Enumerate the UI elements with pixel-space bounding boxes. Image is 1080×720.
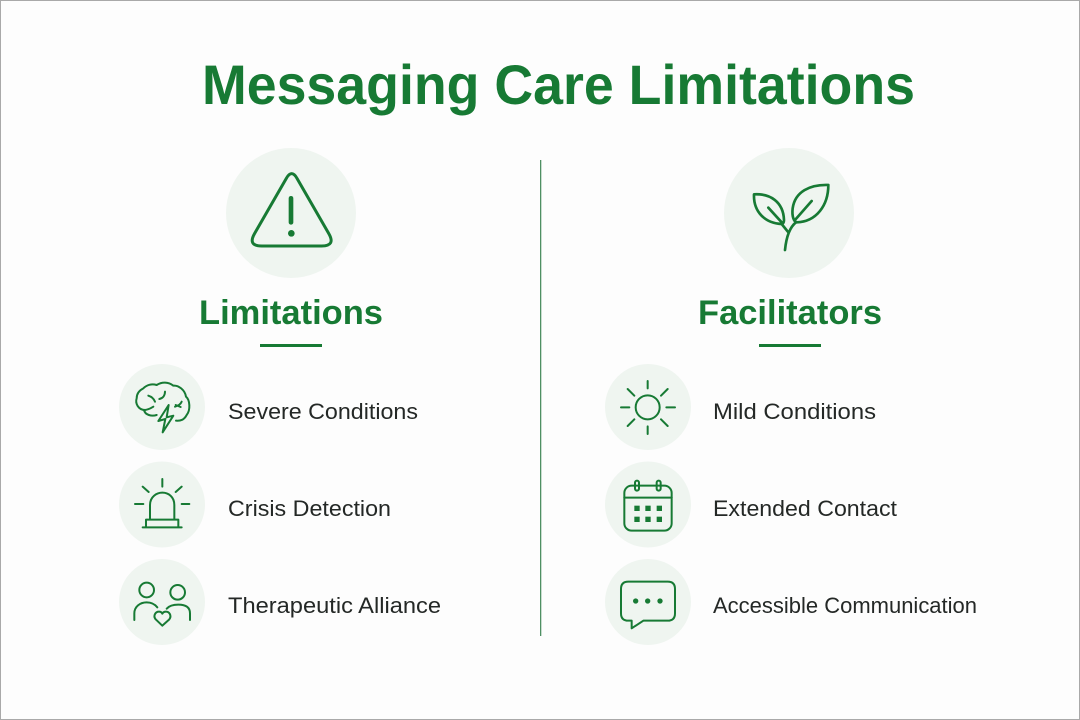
item: mild conditions: Mild Conditions: [713, 399, 876, 424]
item: accessible communication: Accessible Communication: [713, 593, 977, 618]
item: mild conditions: [605, 364, 876, 450]
heading underline: [759, 344, 821, 347]
item: crisis detection: [119, 462, 391, 548]
icon: two people with heart: [134, 583, 190, 626]
heading: facilitators: Facilitators: [698, 294, 882, 332]
icon: chat bubble: [621, 582, 675, 628]
icon: sun: [621, 381, 675, 434]
title: Messaging Care Limitations: [202, 53, 915, 116]
icon: brain with lightning: [136, 383, 189, 432]
item: crisis detection: Crisis Detection: [228, 496, 391, 521]
icon: siren: [135, 479, 189, 527]
icon: sprout: [724, 148, 854, 278]
icon: calendar: [624, 481, 672, 531]
item: extended contact: Extended Contact: [713, 496, 897, 521]
heading: limitations: Limitations: [199, 294, 383, 332]
item: extended contact: [605, 462, 897, 548]
item: therapeutic alliance: Therapeutic Alliance: [228, 593, 441, 618]
panel: facilitators: [605, 148, 977, 645]
center divider: [540, 160, 541, 636]
item: accessible communication: [605, 559, 977, 645]
item: severe conditions: [119, 364, 418, 450]
icon: warning triangle: [226, 148, 356, 278]
panel: limitations: [119, 148, 441, 645]
item: severe conditions: Severe Conditions: [228, 399, 418, 424]
item: therapeutic alliance: [119, 559, 441, 645]
heading underline: [260, 344, 322, 347]
